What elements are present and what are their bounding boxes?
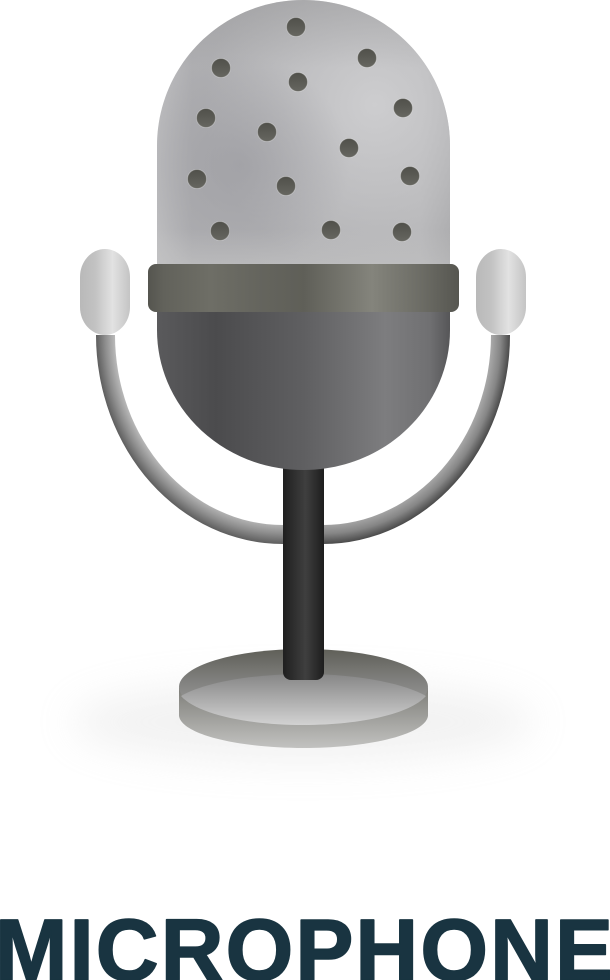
microphone lower body bbox=[157, 305, 450, 470]
right support arm bbox=[323, 335, 510, 544]
grille holes bbox=[188, 18, 420, 242]
right arm cap bbox=[476, 249, 526, 335]
ground shadow bbox=[71, 682, 535, 762]
left arm cap bbox=[80, 249, 130, 335]
collar band bbox=[148, 264, 459, 312]
stand post bbox=[283, 455, 324, 680]
left support arm bbox=[96, 335, 283, 544]
microphone grille head bbox=[157, 0, 450, 270]
stand base bbox=[179, 649, 428, 748]
